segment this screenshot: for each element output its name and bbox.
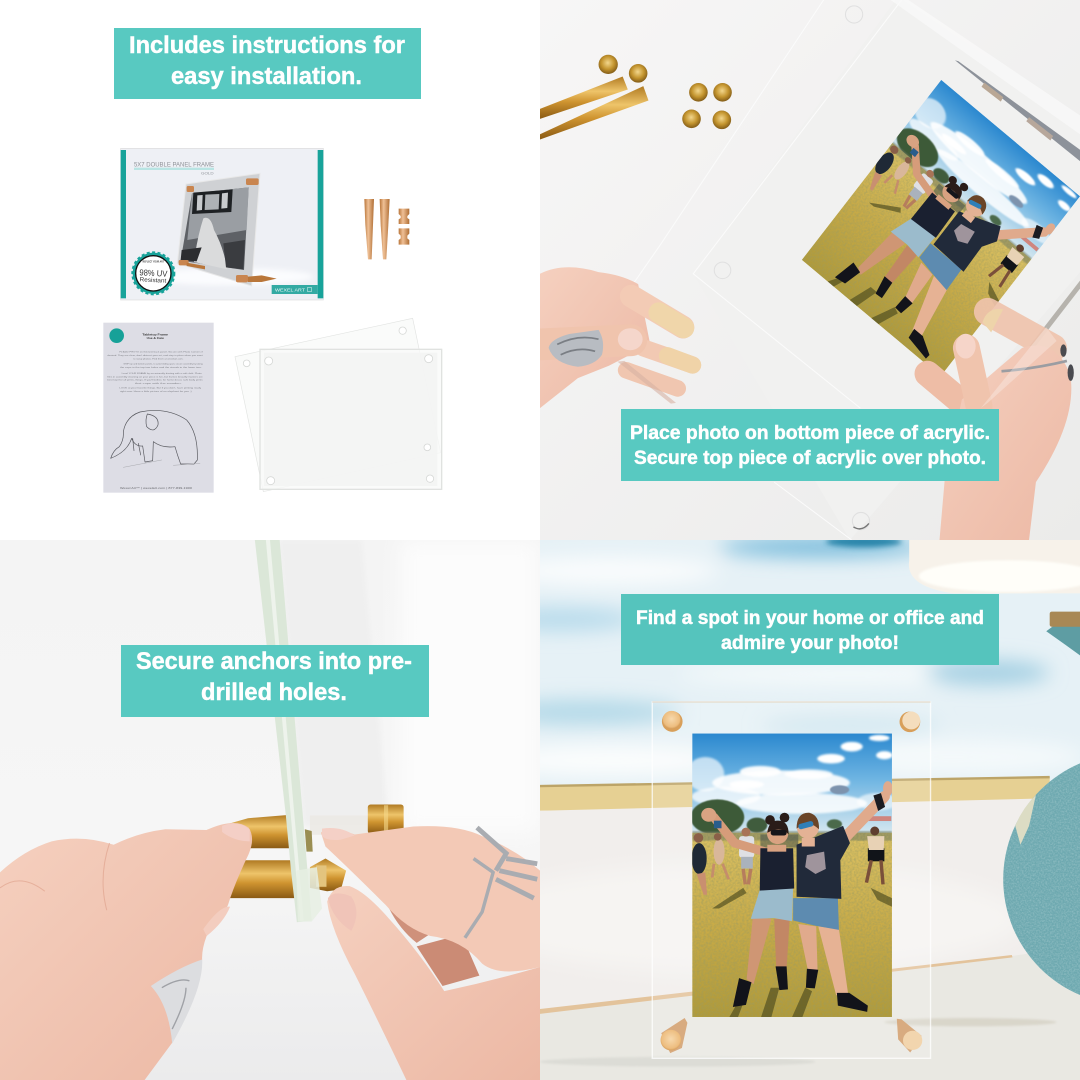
instruction card: LOOK at your favorite things. But if you don't, have printing ready bbox=[119, 387, 202, 390]
caption: find a spot bbox=[621, 594, 999, 665]
photo of two friends bbox=[686, 734, 898, 1017]
caption: includes instructions: easy installation. bbox=[171, 63, 362, 90]
ceramic vase bbox=[1003, 612, 1080, 1005]
caption: find a spot: Find a spot in your home or office and bbox=[636, 608, 984, 629]
instruction card: Level YOUR FRAME by occasionally dusting with a soft cloth. Photo bbox=[122, 372, 203, 375]
acrylic edge strip bbox=[255, 540, 322, 922]
framed photo on box bbox=[177, 173, 277, 286]
anchor pins bbox=[364, 199, 409, 259]
box brand label: WEXEL ART bbox=[275, 287, 305, 292]
instruction card: right now. Have a little picture of an elephant for you :) bbox=[120, 390, 192, 393]
right hand with ring bbox=[927, 309, 1074, 540]
instruction card: Tabletop Frame bbox=[142, 332, 168, 336]
gold frame edge bbox=[540, 777, 1050, 812]
photo held between panels bbox=[798, 76, 1080, 380]
instruction card: desired. They are clear, don't distract your art, and stay in place when you want bbox=[107, 354, 203, 357]
right hand with ring bbox=[321, 826, 540, 1080]
watercolor art on wall bbox=[540, 540, 1080, 785]
box title: 5X7 DOUBLE PANEL FRAME bbox=[134, 163, 214, 169]
caption: secure anchors: drilled holes. bbox=[201, 679, 347, 706]
box brand label bbox=[272, 285, 318, 294]
lamp shade bbox=[909, 540, 1080, 593]
badge: 98% UV resistant: Resistant bbox=[139, 277, 167, 285]
gold anchors bbox=[203, 804, 404, 898]
badge: 98% UV resistant: 98% UV bbox=[139, 267, 168, 279]
instruction card: best kept for all prints, things. If you'll bother, for home decor, safe body prints bbox=[107, 379, 203, 382]
gold anchors and caps bbox=[540, 55, 732, 139]
panel: finished frame on shelf bbox=[540, 540, 1080, 1080]
caption: includes instructions bbox=[114, 28, 421, 99]
caption: place photo: Secure top piece of acrylic over photo. bbox=[634, 448, 986, 469]
instruction card bbox=[103, 323, 214, 493]
caption: includes instructions: Includes instructions for bbox=[129, 32, 405, 59]
badge: 98% UV resistant bbox=[133, 253, 174, 294]
elephant drawing bbox=[111, 410, 200, 467]
acrylic sheets bbox=[605, 0, 1080, 540]
instruction card: files in assembly cleaning on your piece is fun, but frames beautify masters are bbox=[107, 375, 204, 378]
panel: place photo between acrylic bbox=[540, 0, 1080, 540]
instruction card: Fit ADD PHOTO on thinnest back panel. Secure with Photo Corners if bbox=[119, 351, 203, 354]
caption: secure anchors bbox=[121, 645, 429, 717]
right acrylic edge bbox=[1044, 280, 1080, 330]
caption: place photo bbox=[621, 409, 999, 481]
caption: place photo: Place photo on bottom piece of acrylic. bbox=[630, 423, 990, 444]
product box bbox=[121, 148, 323, 300]
badge: 98% UV resistant: REFLECT YOUR ART bbox=[143, 260, 164, 264]
instruction card: that cope with the wooden. bbox=[135, 382, 182, 385]
instruction card: GRIP top and bottom panels, to avoid sliding apart, secure assembly by taking bbox=[123, 363, 204, 366]
acrylic panels bbox=[235, 318, 442, 492]
left hand with ring bbox=[540, 267, 693, 408]
gold standoffs bbox=[661, 711, 922, 1053]
instruction card: Wexel Art™ | wexelart.com | 877-839-1900 bbox=[120, 486, 193, 490]
acrylic frame bbox=[652, 701, 931, 1058]
caption: secure anchors: Secure anchors into pre- bbox=[136, 648, 412, 675]
panel: secure anchors bbox=[0, 540, 540, 1080]
left hand with ring bbox=[0, 823, 252, 1080]
instruction card: the caps in the top two holes and the stands in the lower two. bbox=[120, 366, 202, 369]
instruction card: to swap photos. Find them at wexelart.com. bbox=[133, 357, 184, 360]
shelf surface bbox=[540, 946, 1080, 1080]
product box: GOLD bbox=[201, 171, 214, 176]
caption: find a spot: admire your photo! bbox=[721, 633, 899, 654]
instruction card: Use & Care bbox=[147, 336, 165, 340]
panel: instructions and parts bbox=[103, 28, 442, 493]
